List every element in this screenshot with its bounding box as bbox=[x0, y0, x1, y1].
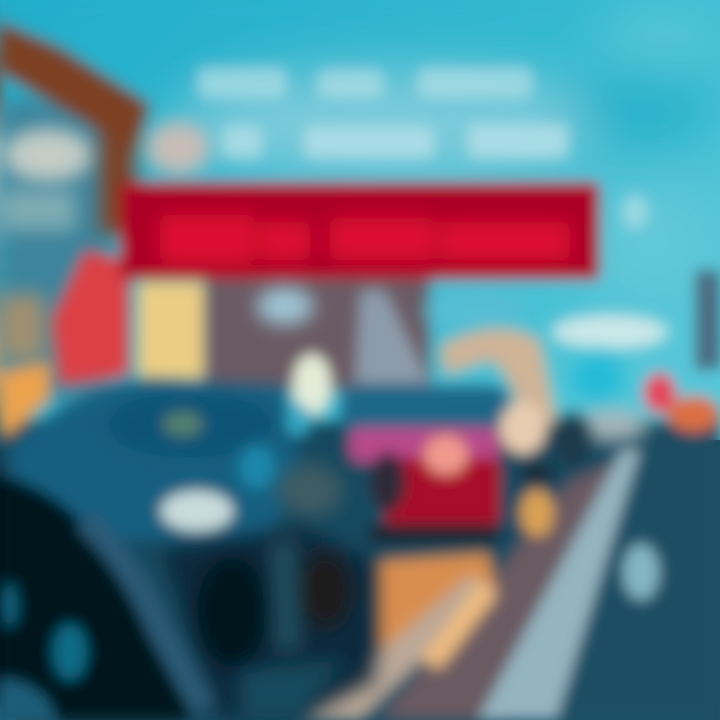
storefront wall bbox=[0, 100, 110, 400]
blue car body bbox=[10, 378, 300, 540]
beige curved structure bbox=[440, 329, 558, 425]
light curb streak bbox=[300, 575, 495, 720]
wheel left dot bbox=[0, 583, 18, 627]
storefront lower panel bbox=[0, 295, 45, 360]
cyan lamp glow bbox=[286, 404, 310, 436]
blue car bright fender bbox=[239, 445, 275, 489]
storefront window bbox=[0, 190, 75, 230]
banner background bbox=[120, 182, 600, 280]
wheel corner highlight bbox=[0, 678, 55, 720]
hazy road horizon bbox=[576, 409, 648, 441]
orange curb bright bbox=[420, 580, 498, 670]
cyan distance patch bbox=[570, 352, 626, 404]
orange shop panel bbox=[0, 362, 50, 435]
road surface bbox=[380, 430, 720, 720]
cloud haze bbox=[170, 10, 720, 300]
foreground wheel bbox=[0, 475, 203, 720]
distant right side buildings and cars bbox=[552, 270, 720, 468]
sky background bbox=[0, 0, 720, 460]
red car body bbox=[385, 458, 500, 528]
grey bumper haze bbox=[278, 464, 342, 516]
red car bbox=[340, 385, 555, 544]
heading text, illegible in the reference bbox=[198, 68, 648, 229]
distant dark car bbox=[552, 412, 592, 468]
dark building bbox=[695, 270, 720, 370]
central buildings bbox=[205, 278, 668, 425]
blue car badge bbox=[163, 412, 203, 436]
storefront window glare bbox=[4, 129, 92, 181]
dark brown shadow bbox=[299, 552, 351, 628]
wheel black disc bbox=[0, 475, 195, 720]
red car left dark bbox=[370, 452, 406, 512]
brown building bbox=[205, 278, 430, 390]
edge underlay: road bbox=[0, 440, 720, 720]
red car roof bbox=[340, 385, 510, 435]
wheel rim arc bbox=[85, 520, 203, 708]
central dark gap bbox=[160, 464, 375, 720]
blue car windshield bbox=[105, 393, 275, 457]
lower teal road bbox=[240, 660, 345, 720]
grey lane stripe bbox=[478, 450, 640, 720]
red distant car bbox=[644, 373, 676, 413]
red car magenta band bbox=[350, 428, 500, 462]
black shadow bbox=[196, 557, 268, 667]
left storefront building bbox=[0, 22, 210, 435]
orange patch bbox=[378, 552, 495, 660]
wheel teal dot bbox=[53, 624, 87, 680]
brown pavement bbox=[380, 460, 620, 720]
red shop sign bbox=[52, 250, 130, 385]
ground background bbox=[0, 420, 720, 720]
banner text, illegible in the reference bbox=[160, 215, 570, 263]
amber curb light bbox=[520, 489, 554, 537]
dark wheel bbox=[519, 461, 555, 485]
grey blue post bbox=[272, 540, 300, 650]
grey tower bbox=[355, 290, 430, 385]
yellow shop panel bbox=[138, 282, 206, 380]
roof beam bbox=[0, 22, 150, 150]
red banner with illegible title bbox=[120, 182, 600, 280]
dark car underside bbox=[160, 525, 375, 720]
white street lamp bbox=[293, 354, 331, 414]
pale window bbox=[257, 288, 313, 324]
orange distant car bbox=[668, 396, 720, 432]
dark road right bbox=[520, 430, 720, 720]
red car dark shadow bbox=[368, 524, 500, 544]
blue car headlight bbox=[161, 491, 233, 531]
beige light bbox=[500, 402, 546, 454]
orange curb and reflection bbox=[300, 489, 554, 720]
pillar bbox=[100, 110, 136, 235]
red car headlight bbox=[424, 435, 468, 475]
white cloud bbox=[552, 315, 668, 349]
blue car bbox=[10, 354, 331, 540]
edge underlay: sky bbox=[0, 0, 720, 440]
pillar highlight bbox=[146, 122, 210, 174]
edge underlay: left side bbox=[0, 0, 16, 720]
cyan gap bbox=[425, 290, 525, 330]
road marking dot bbox=[623, 544, 659, 600]
